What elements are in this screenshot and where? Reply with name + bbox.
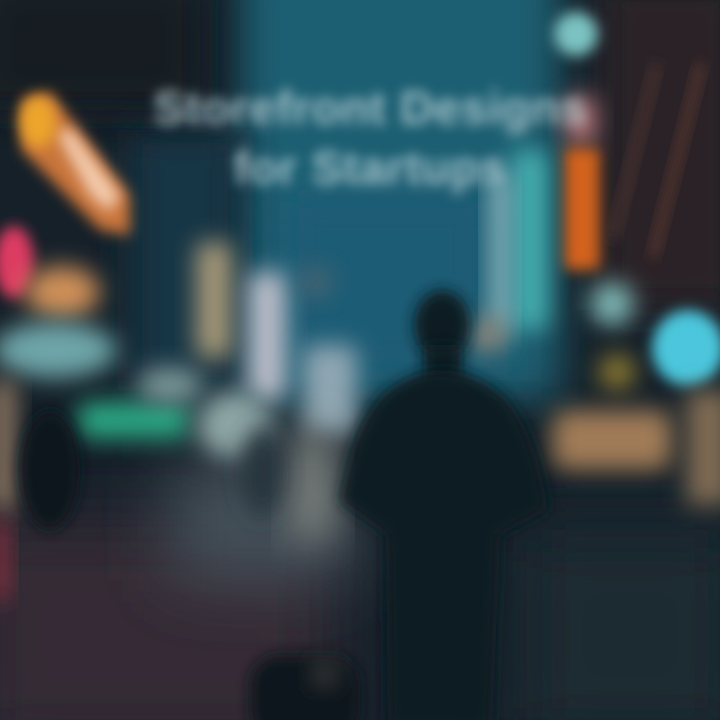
title: for Startups	[233, 141, 507, 194]
foreground pedestrian silhouettes	[20, 410, 360, 720]
right neon signs	[470, 12, 720, 505]
title	[148, 81, 591, 200]
main silhouette figure	[340, 290, 548, 720]
title: Storefront Designs	[153, 81, 587, 134]
central storefront lights	[196, 242, 357, 540]
left neon signs	[0, 92, 204, 600]
